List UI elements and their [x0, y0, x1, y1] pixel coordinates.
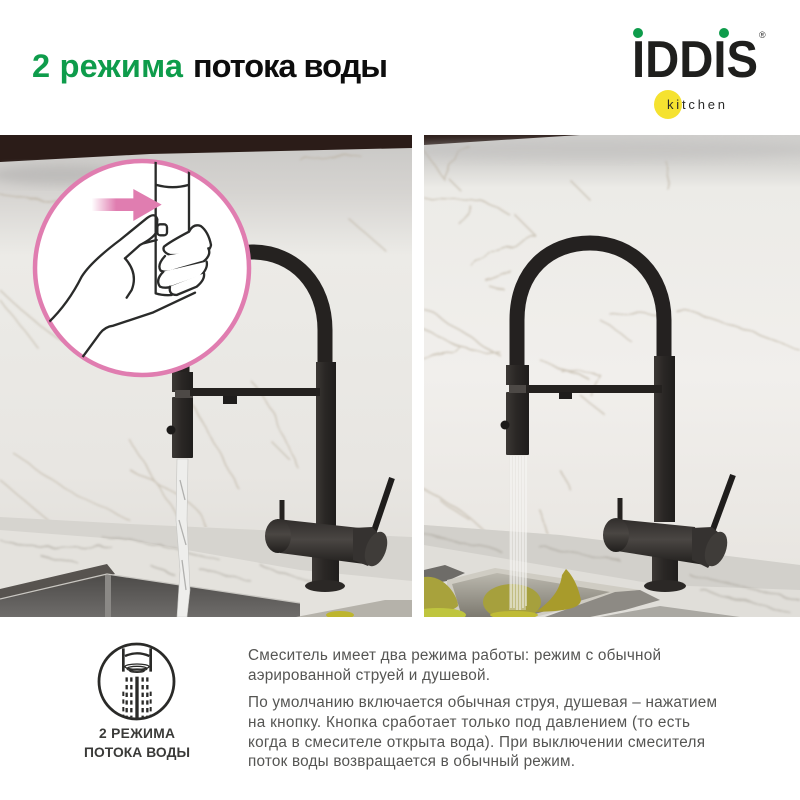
icon caption: ПОТОКА ВОДЫ	[84, 745, 190, 760]
sinks	[424, 565, 465, 582]
shelf	[424, 135, 580, 145]
description text: По умолчанию включается обычная струя, душевая – нажатием	[248, 694, 717, 711]
counter	[204, 527, 208, 528]
title: потока воды	[193, 48, 388, 84]
logo: IDDIS kitchen: IDDIS	[632, 31, 758, 89]
description text: поток воды возвращается в обычный режим.	[248, 753, 575, 770]
description text: когда в смесителе открыта вода). При выключении смесителя	[248, 734, 705, 751]
title	[32, 48, 388, 84]
logo: IDDIS kitchen: ®	[759, 30, 766, 40]
logo: IDDIS kitchen: kitchen	[667, 97, 725, 112]
sink	[0, 574, 300, 617]
callout: hand pressing the button	[35, 160, 249, 375]
description text: на кнопку. Кнопка сработает только под давлением (то есть	[248, 714, 690, 731]
pears	[424, 577, 458, 611]
title: 2 режима	[32, 48, 184, 84]
icon caption: 2 РЕЖИМА	[99, 726, 175, 741]
description text: аэрированной струей и душевой.	[248, 667, 490, 684]
photo: faucet with aerated stream	[0, 135, 412, 619]
counter	[424, 546, 584, 572]
shelf	[0, 135, 412, 162]
stream	[176, 459, 190, 617]
icon: two flow modes aerator	[99, 644, 174, 719]
photo: faucet with shower stream	[424, 135, 800, 617]
faucet	[166, 252, 392, 592]
icon caption	[84, 726, 190, 760]
faucet	[500, 243, 733, 592]
logo: IDDIS kitchen	[632, 28, 766, 119]
description text	[248, 647, 717, 770]
description text: Смеситель имеет два режима работы: режим с обычной	[248, 647, 661, 664]
stream	[509, 455, 526, 610]
